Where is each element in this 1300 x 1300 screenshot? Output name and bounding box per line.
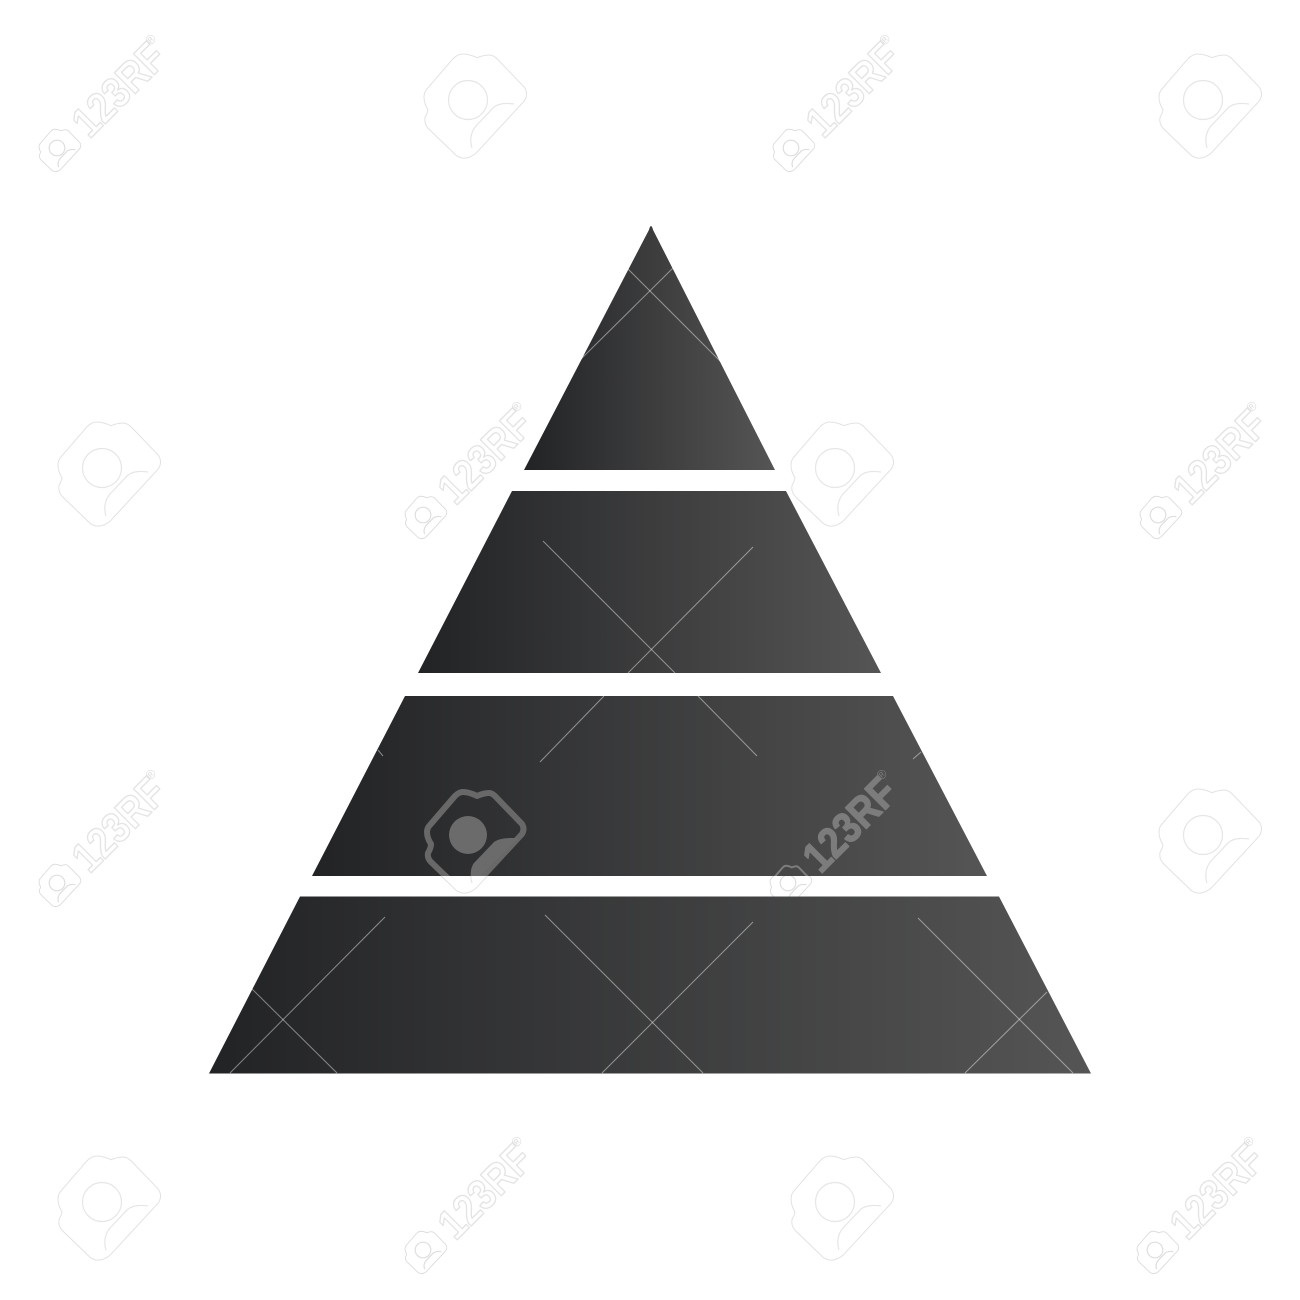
watermark: wordmark second row, fourth column: [1122, 394, 1285, 556]
watermark: logo third row, second column: [427, 792, 524, 890]
watermark: logo second row, first column: [61, 425, 158, 523]
watermark: wordmark second row, second column: [387, 394, 550, 556]
watermark: logo top row, second column: [427, 57, 524, 155]
watermark: small logo third row, third column: [772, 866, 810, 905]
watermark: wordmark second row, second column: ®: [508, 398, 526, 415]
watermark: wordmark bottom row, second column: 123RF: [429, 1135, 542, 1249]
watermark: wordmark top row, first column: ®: [142, 31, 160, 48]
watermark: wordmark second row, fourth column: ®: [1243, 398, 1261, 415]
watermark: logo top row, fourth column: [1162, 57, 1258, 155]
watermark grid lines over pyramid: [230, 268, 1073, 1073]
pyramid tier 3: [312, 696, 987, 876]
pyramid: [209, 226, 1091, 1074]
watermark: wordmark bottom row, fourth column: 123RF: [1161, 1135, 1274, 1249]
pyramid tier 4 (base): [209, 896, 1091, 1074]
pyramid tier 2: [418, 491, 881, 673]
watermark: wordmark bottom row, fourth column: ®: [1240, 1133, 1258, 1150]
watermark: wordmark second row, fourth column: 123RF: [1164, 400, 1277, 514]
watermark: wordmark third row, first column: ®: [142, 766, 160, 783]
watermark: wordmark bottom row, second column: ®: [508, 1133, 526, 1150]
watermark: wordmark top row, third column: [755, 27, 918, 189]
watermark small logo on third tier: [774, 864, 808, 876]
watermark: wordmark top row, first column: 123RF: [63, 33, 176, 147]
watermark: wordmark top row, third column: ®: [876, 31, 894, 48]
watermark: wordmark third row, first column: 123RF: [63, 768, 176, 882]
watermark: logo bottom row, first column: [61, 1159, 158, 1257]
watermark: logo bottom row, third column: [794, 1159, 890, 1257]
pyramid tier 1 (apex): [524, 226, 775, 470]
watermark logo on third tier: [427, 792, 524, 890]
watermark: wordmark third row, first column: [21, 762, 184, 924]
watermark: wordmark bottom row, second column: [387, 1129, 550, 1291]
watermark: wordmark top row, first column: [21, 27, 184, 189]
watermark: logo second row, third column: [794, 425, 890, 523]
watermark: wordmark second row, second column: 123RF: [429, 400, 542, 514]
watermark: logo third row, fourth column: [1162, 792, 1258, 890]
watermark: wordmark bottom row, fourth column: [1119, 1129, 1282, 1291]
watermark wordmark on third tier: ®: [873, 766, 891, 783]
watermark: wordmark top row, third column: 123RF: [797, 33, 910, 147]
watermark wordmark on third tier: 123RF: [794, 768, 907, 882]
